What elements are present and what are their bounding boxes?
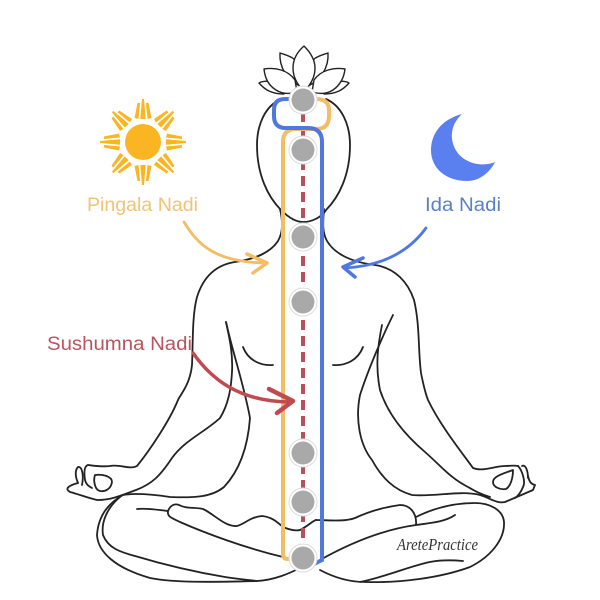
pingala channel: orange line [283,99,329,559]
right neck and shoulder [323,209,518,469]
right foot [316,505,416,525]
label: Pingala Nadi: Pingala Nadi [87,195,198,216]
arrow: Ida [343,228,426,277]
arrow: Sushumna [193,353,293,413]
icon: sun [100,99,186,185]
chakra points [289,86,317,572]
head [257,99,350,222]
meditating figure outline [67,99,535,582]
arrow: Pingala [184,222,267,273]
left leg [97,495,300,582]
chest lines [243,347,273,365]
right leg [320,503,504,582]
label: Ida Nadi: Ida Nadi [425,195,501,216]
left hand [76,467,83,485]
right arm inner and torso [358,315,535,502]
watermark: ArétéPractice: AretePractice [396,535,478,554]
sushumna channel: red dashed line [301,112,305,566]
left neck and shoulder [88,209,282,467]
left foot [137,504,300,530]
ida channel: blue line [274,99,322,566]
label: Sushumna Nadi: Sushumna Nadi [47,334,192,355]
icon: crescent moon [431,114,495,181]
left arm inner and torso [67,322,232,500]
lotus flower [259,46,349,94]
right hand [515,466,524,498]
